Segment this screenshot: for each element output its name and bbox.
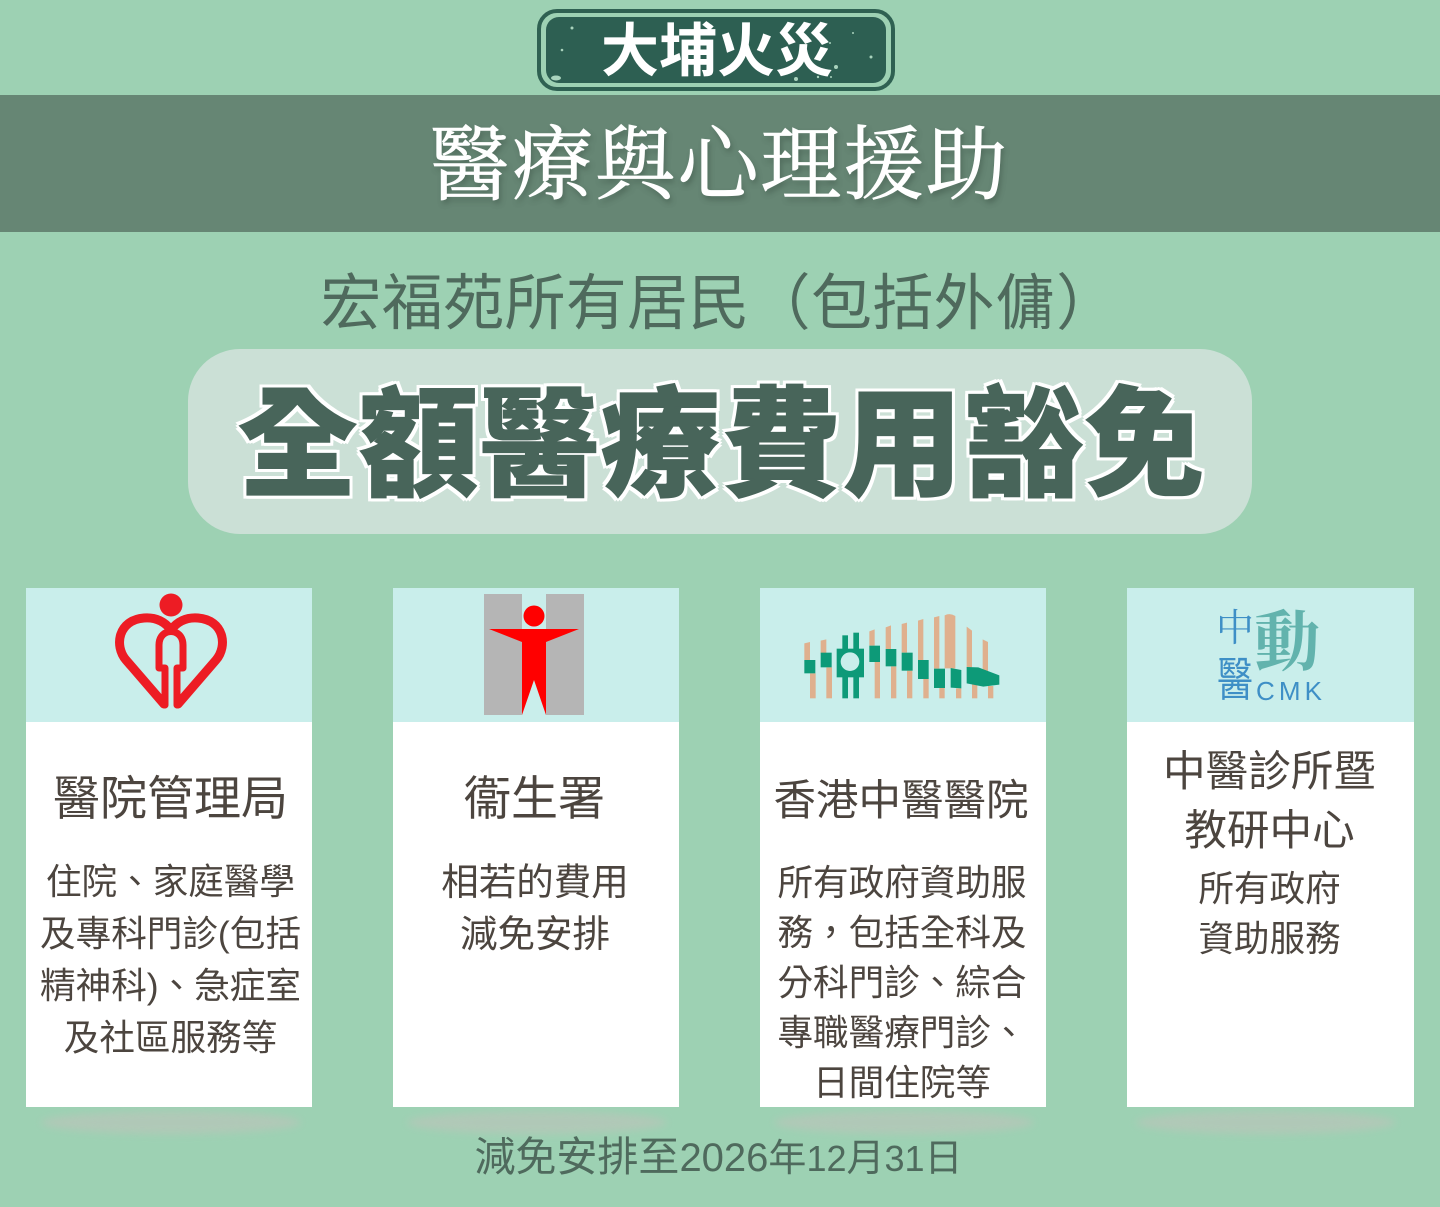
icon: Chinese Medicine Hospital xyxy=(804,614,1000,698)
heading line 2: 教研中心 xyxy=(1184,807,1355,855)
icon: CMK logo xyxy=(1216,602,1323,707)
panel: Chinese Medicine Clinic xyxy=(1127,588,1414,1107)
badge specks xyxy=(551,26,872,81)
body text xyxy=(40,854,301,1058)
body text: 所有政府 xyxy=(1198,869,1341,909)
panel: Chinese Medicine Hospital xyxy=(760,588,1046,1107)
pill headline: 全額醫療費用豁免 xyxy=(238,379,1206,512)
heading: 衞生署 xyxy=(464,772,605,825)
card shadow 2 xyxy=(407,1111,667,1134)
icon: Hospital Authority heart xyxy=(115,594,227,708)
subheading: 宏福苑所有居民（包括外傭） xyxy=(321,269,1117,337)
panel: Hospital Authority xyxy=(26,588,312,1107)
body text xyxy=(777,862,1027,1102)
card shadow 1 xyxy=(41,1111,301,1134)
icon: Department of Health figure xyxy=(484,594,584,715)
footer note: 減免安排至2026年12月31日 xyxy=(474,1134,963,1180)
card shadow 3 xyxy=(774,1111,1034,1134)
heading: 香港中醫醫院 xyxy=(773,778,1028,825)
body text: 務，包括全科及 xyxy=(777,904,1027,956)
body text: 相若的費用 xyxy=(441,860,629,902)
badge inner plate xyxy=(546,17,886,83)
badge text: 大埔火災 xyxy=(601,19,833,84)
body text: 資助服務 xyxy=(1198,918,1341,958)
title banner xyxy=(0,95,1440,232)
body text: 及社區服務等 xyxy=(64,1018,277,1058)
body text: 住院、家庭醫學 xyxy=(46,854,295,905)
body text: 及專科門診(包括 xyxy=(40,914,301,954)
body text: 專職醫療門診、 xyxy=(777,1004,1027,1056)
icon: CMK logo: CMK xyxy=(1256,676,1323,706)
pill: fee waiver xyxy=(188,349,1252,534)
heading: 中醫診所暨 xyxy=(1163,748,1376,796)
heading: 醫院管理局 xyxy=(53,772,288,825)
logo header xyxy=(1127,588,1414,722)
body text: 精神科)、急症室 xyxy=(40,958,301,1009)
panel: Department of Health xyxy=(393,588,679,1107)
body text: 日間住院等 xyxy=(813,1062,991,1102)
body text: 分科門診、綜合 xyxy=(777,954,1027,1006)
body text xyxy=(441,860,629,954)
title: 醫療與心理援助 xyxy=(429,121,1009,211)
body text xyxy=(1198,869,1341,958)
body text: 減免安排 xyxy=(460,912,610,954)
logo header xyxy=(760,588,1046,722)
logo header xyxy=(393,588,679,722)
badge: 大埔火災 xyxy=(537,9,895,91)
body text: 所有政府資助服 xyxy=(777,862,1027,902)
card shadow 4 xyxy=(1136,1111,1396,1134)
logo header xyxy=(26,588,312,722)
